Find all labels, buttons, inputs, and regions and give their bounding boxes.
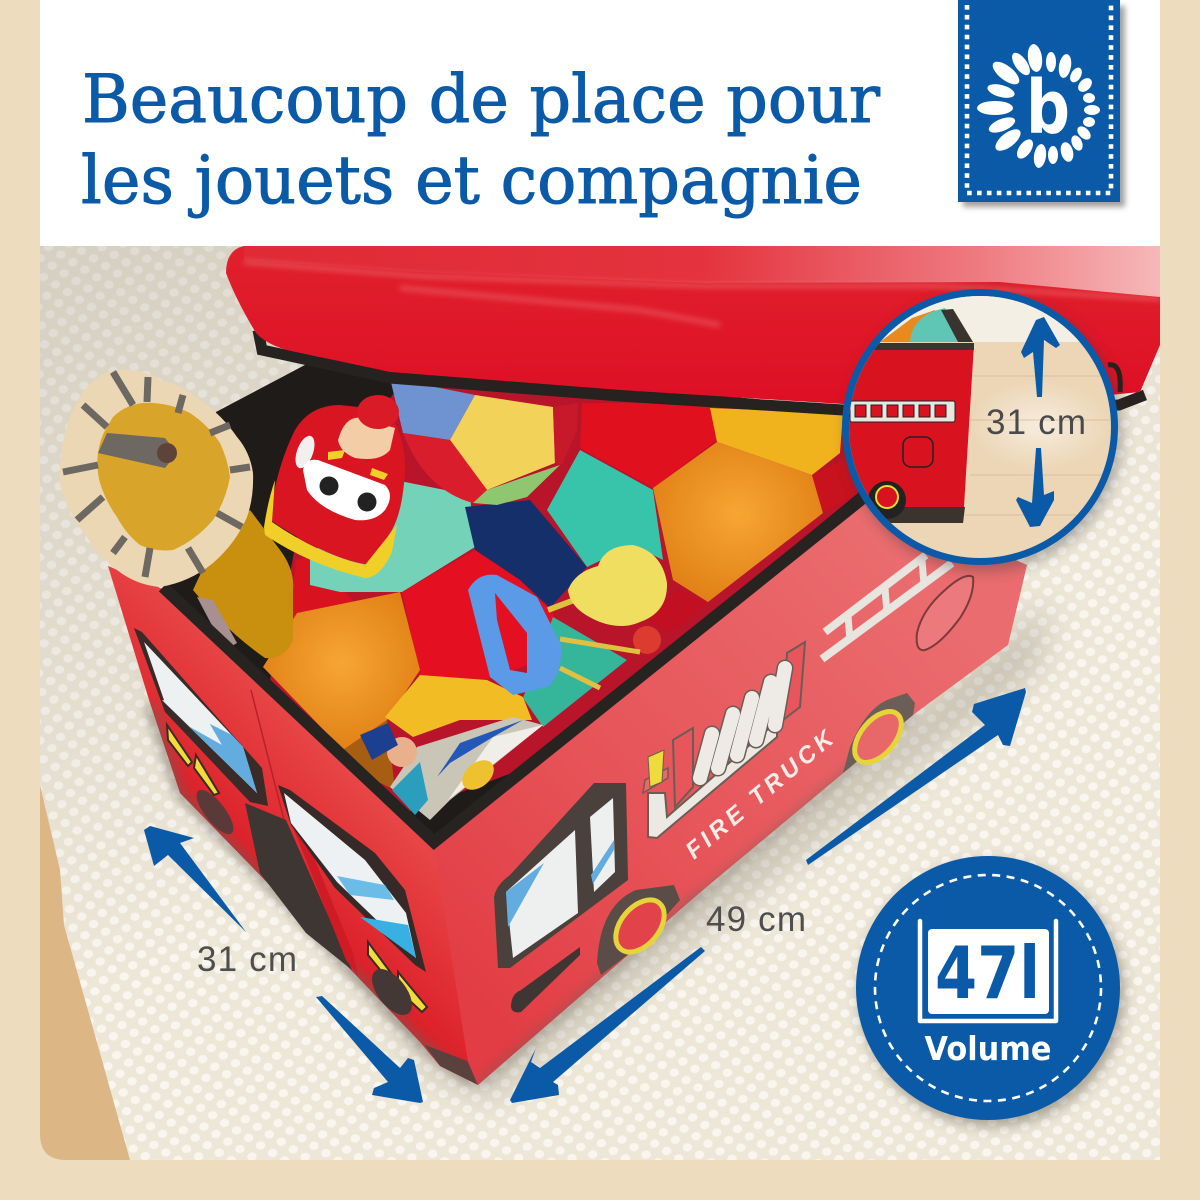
rear wheel <box>843 693 915 773</box>
truck lamps <box>196 790 234 834</box>
hose reel <box>643 642 805 838</box>
arrow: left depth lower <box>316 996 423 1103</box>
brand logo tag <box>958 0 1125 207</box>
fire truck label: FIRE TRUCK <box>681 725 840 865</box>
lion toy <box>59 370 253 587</box>
title <box>81 61 880 219</box>
truck cab window <box>494 783 628 968</box>
ladder <box>822 555 952 659</box>
height inset lens <box>840 280 1130 580</box>
pink tag on lion <box>197 597 237 650</box>
lens arrow down <box>1016 448 1054 527</box>
plush ball: centre <box>263 480 708 790</box>
lens ladder <box>850 401 955 422</box>
box left face <box>108 566 478 1085</box>
lens wood floor <box>849 296 1111 558</box>
police toy <box>360 717 543 820</box>
lens arrow up <box>1021 317 1060 397</box>
box corner base <box>425 1045 478 1085</box>
header band <box>40 0 1160 246</box>
label: 49 cm width: 49 cm <box>706 900 806 939</box>
volume badge <box>856 856 1124 1126</box>
dark back wall <box>165 357 870 842</box>
box interior <box>163 357 870 842</box>
toy bed underlay <box>270 385 862 815</box>
black piping <box>163 494 868 842</box>
large plush ball: right <box>547 403 857 602</box>
lens height label: 31 cm <box>986 403 1086 442</box>
front wheel <box>597 885 680 975</box>
storage box <box>59 246 1160 1085</box>
wood floor <box>40 785 130 1160</box>
arrow: width lower <box>510 947 705 1103</box>
truck window left <box>134 628 268 806</box>
volume label: Volume <box>924 1029 1052 1068</box>
arrow: left depth upper <box>144 826 246 932</box>
lion toy body <box>193 510 293 658</box>
logo letter: b <box>1026 65 1070 151</box>
truck window right <box>278 785 426 972</box>
truck grille <box>245 803 352 970</box>
truck door outline <box>917 576 973 650</box>
truck bumper <box>511 947 580 1012</box>
fade along base <box>150 705 472 1082</box>
rug <box>40 246 1160 1160</box>
label: 31 cm depth: 31 cm <box>197 940 297 979</box>
plush ball: top <box>390 378 578 505</box>
box floor shadow <box>334 604 1058 1108</box>
box right face <box>434 494 1027 1085</box>
toy car driver <box>328 395 399 480</box>
product photo <box>40 246 1160 1160</box>
toy car <box>264 395 405 578</box>
rattle toy <box>468 545 667 695</box>
box lid <box>226 246 1160 410</box>
volume container icon: 47l <box>935 931 1040 1015</box>
title: Beaucoup de place pour <box>82 61 880 138</box>
arrow: width upper <box>806 688 1026 865</box>
headlights <box>167 725 192 766</box>
title: les jouets et compagnie <box>81 142 862 219</box>
lens box <box>840 308 974 523</box>
logo flower petals <box>977 43 1100 169</box>
